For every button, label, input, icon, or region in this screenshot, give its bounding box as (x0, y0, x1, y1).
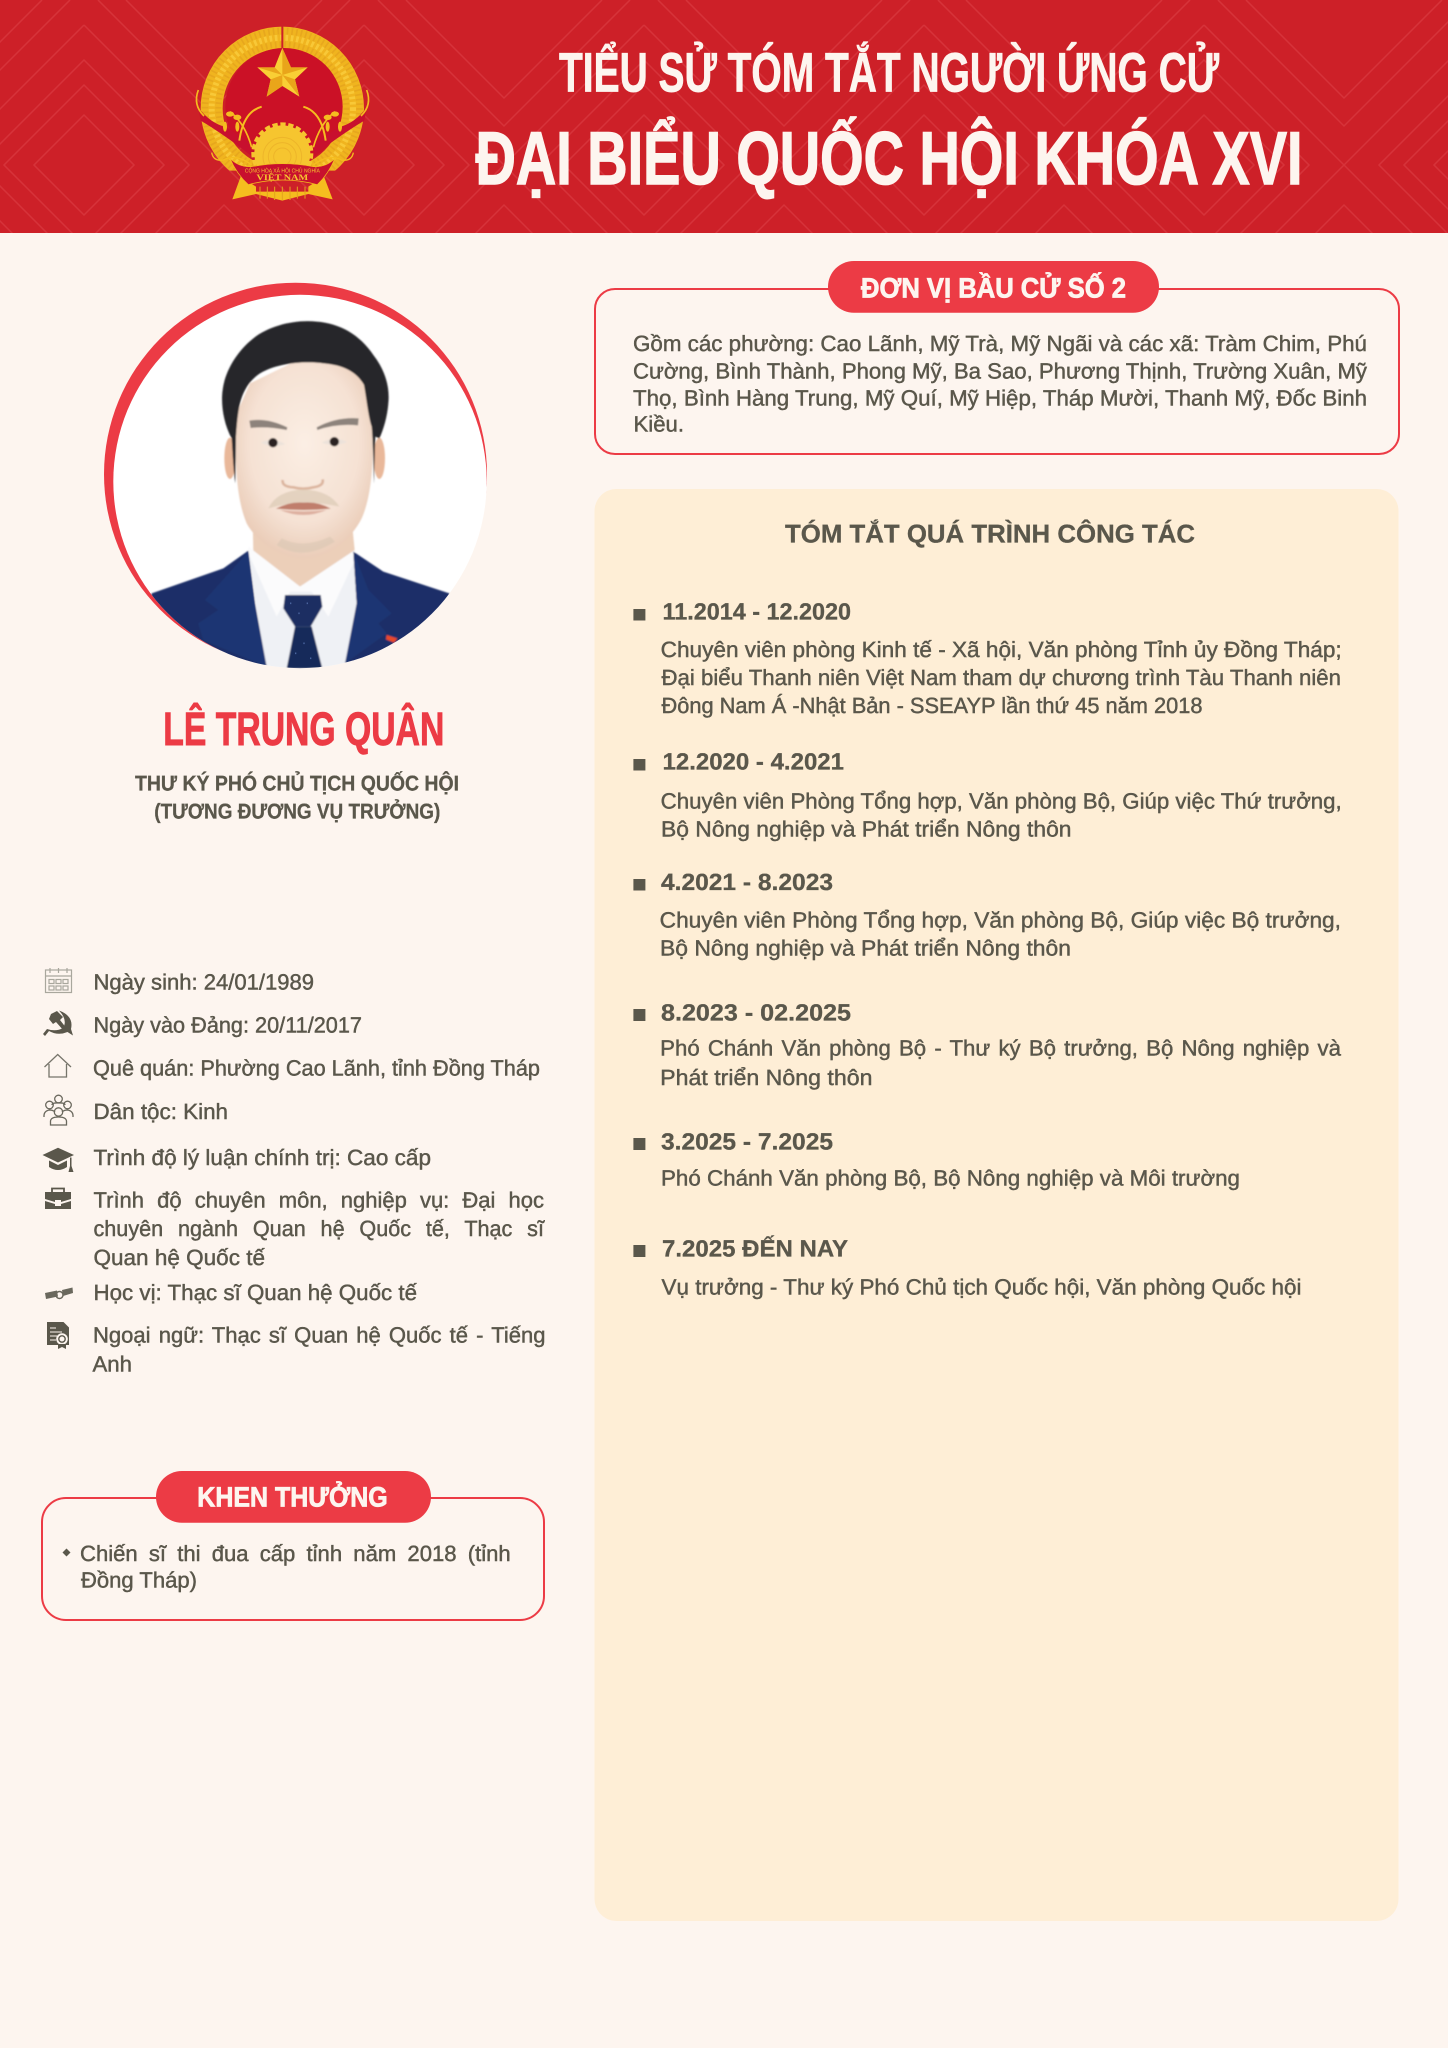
career entry 6 (633, 1235, 1302, 1299)
birth date: Ngày sinh: 24/01/1989 (94, 970, 314, 994)
icon: gear (251, 122, 314, 166)
electoral unit text: Thọ, Bình Hàng Trung, Mỹ Quí, Mỹ Hiệp, Tháp Mười, Thanh Mỹ, Đốc Binh (633, 385, 1367, 410)
icon: diploma (45, 1288, 73, 1299)
political theory level: Trình độ lý luận chính trị: Cao cấp (94, 1145, 431, 1170)
career entry 1: Đại biểu Thanh niên Việt Nam tham dự chương trình Tàu Thanh niên (662, 665, 1341, 690)
career entry 1: Đông Nam Á -Nhật Bản - SSEAYP lần thứ 45 năm 2018 (662, 693, 1202, 718)
candidate position: (TƯƠNG ĐƯƠNG VỤ TRƯỞNG) (154, 798, 440, 823)
career entry 2: Chuyên viên Phòng Tổng hợp, Văn phòng Bộ, Giúp việc Thứ trưởng, (661, 788, 1342, 813)
career entry 4: 8.2023 - 02.2025 (661, 999, 851, 1025)
icon: certificate (47, 1322, 69, 1349)
icon: briefcase (45, 1188, 71, 1209)
career entry 3: Chuyên viên Phòng Tổng hợp, Văn phòng Bộ, Giúp việc Bộ trưởng, (660, 908, 1341, 933)
bullet diamond (62, 1548, 70, 1556)
panel: career summary (594, 489, 1398, 1921)
career entry 5: Phó Chánh Văn phòng Bộ, Bộ Nông nghiệp và Môi trường (661, 1165, 1240, 1190)
emblem motto: CỘNG HÒA XÃ HỘI CHỦ NGHĨA (245, 167, 320, 174)
awards pill heading (156, 1471, 431, 1523)
award text: Chiến sĩ thi đua cấp tỉnh năm 2018 (tỉnh (80, 1541, 511, 1566)
portrait photo (140, 321, 457, 668)
icon: star (257, 48, 308, 97)
career entry 2: 12.2020 - 4.2021 (662, 749, 844, 775)
electoral unit text (633, 331, 1367, 437)
icon: hammer and sickle (43, 1010, 73, 1036)
personal details list (42, 968, 546, 1377)
portrait ring (104, 283, 487, 666)
career entry 6: 7.2025 ĐẾN NAY (662, 1235, 848, 1262)
electoral unit pill heading (828, 261, 1159, 313)
party entry date: Ngày vào Đảng: 20/11/2017 (94, 1012, 362, 1038)
foreign language: Anh (92, 1352, 132, 1377)
home town: Quê quán: Phường Cao Lãnh, tỉnh Đồng Tháp (93, 1055, 540, 1080)
emblem motto: VIỆT NAM (256, 173, 308, 182)
icon: people (44, 1095, 73, 1125)
icon: house (44, 1054, 71, 1077)
emblem motto (245, 167, 320, 182)
ethnicity: Dân tộc: Kinh (94, 1099, 228, 1124)
icon: calendar (46, 968, 72, 992)
academic degree: Học vị: Thạc sĩ Quan hệ Quốc tế (94, 1280, 417, 1305)
professional qualification: Quan hệ Quốc tế (94, 1245, 265, 1270)
career entry 4: Phát triển Nông thôn (660, 1065, 872, 1090)
foreign language (92, 1323, 546, 1377)
awards pill heading: KHEN THƯỞNG (197, 1481, 388, 1513)
emblem base (232, 177, 333, 201)
electoral unit text: Kiều. (634, 412, 684, 437)
portrait (104, 283, 487, 668)
career entry 1: Chuyên viên phòng Kinh tế - Xã hội, Văn phòng Tỉnh ủy Đồng Tháp; (661, 637, 1342, 662)
career entry 3 (633, 869, 1341, 961)
icon: national emblem (196, 26, 369, 201)
electoral unit pill heading: ĐƠN VỊ BẦU CỬ SỐ 2 (861, 272, 1126, 304)
career entry 2: Bộ Nông nghiệp và Phát triển Nông thôn (661, 816, 1072, 841)
foreign language: Ngoại ngữ: Thạc sĩ Quan hệ Quốc tế - Tiếng (93, 1323, 546, 1348)
candidate position: THƯ KÝ PHÓ CHỦ TỊCH QUỐC HỘI (135, 771, 459, 796)
career entry 5: 3.2025 - 7.2025 (661, 1128, 833, 1154)
candidate name: LÊ TRUNG QUÂN (163, 702, 444, 755)
emblem ribbon (230, 158, 335, 185)
candidate position (135, 771, 459, 823)
award text (80, 1541, 511, 1593)
professional qualification: Trình độ chuyên môn, nghiệp vụ: Đại học (94, 1187, 544, 1212)
career entry 2 (633, 749, 1342, 841)
award text: Đồng Tháp) (81, 1568, 197, 1593)
electoral unit text: Gồm các phường: Cao Lãnh, Mỹ Trà, Mỹ Ngãi và các xã: Tràm Chim, Phú (633, 331, 1367, 356)
career entry 3: 4.2021 - 8.2023 (661, 869, 833, 895)
professional qualification: chuyên ngành Quan hệ Quốc tế, Thạc sĩ (94, 1216, 545, 1241)
career heading: TÓM TẮT QUÁ TRÌNH CÔNG TÁC (785, 519, 1195, 549)
career entry 1 (633, 598, 1342, 718)
career entry 4: Phó Chánh Văn phòng Bộ - Thư ký Bộ trưởng, Bộ Nông nghiệp và (660, 1035, 1342, 1060)
icon: graduation cap (42, 1148, 74, 1172)
career entry 4 (633, 999, 1342, 1090)
career entry 3: Bộ Nông nghiệp và Phát triển Nông thôn (660, 936, 1071, 961)
professional qualification (94, 1187, 545, 1270)
header banner (0, 0, 1448, 233)
career entry 5 (633, 1128, 1240, 1190)
career entry 6: Vụ trưởng - Thư ký Phó Chủ tịch Quốc hội, Văn phòng Quốc hội (662, 1274, 1302, 1299)
electoral unit text: Cường, Bình Thành, Phong Mỹ, Ba Sao, Phương Thịnh, Trường Xuân, Mỹ (633, 358, 1367, 383)
panel: electoral unit (595, 261, 1399, 454)
career entry 1: 11.2014 - 12.2020 (662, 598, 851, 624)
panel: awards (42, 1471, 544, 1620)
